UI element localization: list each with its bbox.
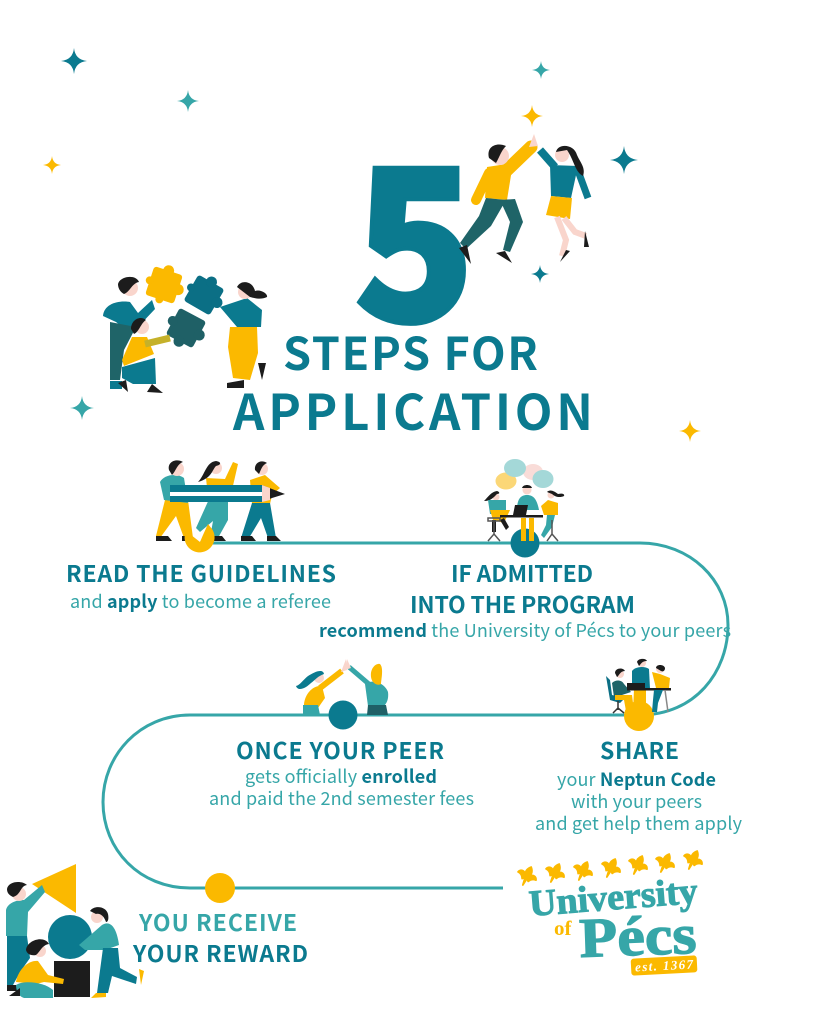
step description: and paid the 2nd semester fees (209, 785, 474, 811)
title line: steps for: STEPS FOR (283, 318, 538, 383)
illustration: team carrying pencil (156, 460, 285, 541)
step marker (328, 700, 358, 730)
step heading: INTO THE PROGRAM (410, 586, 635, 620)
step description: with your peers (571, 788, 702, 814)
title (232, 76, 593, 445)
logo wordmark: University: University (527, 871, 700, 925)
step 3: share (535, 659, 743, 836)
winding path connecting the steps (103, 543, 728, 888)
step description: and apply to become a referee (70, 588, 331, 614)
step marker (185, 524, 215, 552)
step description (209, 763, 474, 811)
title numeral 5: 5 (354, 76, 475, 382)
title line: application: APPLICATION (232, 374, 593, 445)
step marker (624, 701, 654, 731)
step heading (410, 555, 635, 620)
step 2: if admitted (319, 459, 731, 643)
step heading: YOU RECEIVE (138, 904, 297, 938)
illustration: team at desk (606, 659, 671, 713)
step marker (510, 528, 540, 558)
logo badge: established date: est. 1367 (635, 956, 694, 975)
step description (535, 766, 743, 836)
illustration: high five pair (459, 134, 589, 264)
step description: gets officially enrolled (245, 763, 437, 789)
illustration: team building shapes (6, 864, 144, 998)
illustration: puzzle team (103, 260, 267, 393)
step heading: YOUR REWARD (132, 935, 308, 969)
step marker (205, 873, 235, 903)
decorative sparkle stars (43, 48, 701, 442)
illustration: two peers high five (296, 659, 388, 715)
step heading: READ THE GUIDELINES (66, 555, 336, 589)
logo wordmark: Pécs: Pécs (578, 904, 697, 970)
step description: and get help them apply (535, 810, 743, 836)
step description: recommend the University of Pécs to your peers (319, 617, 731, 643)
step heading: IF ADMITTED (451, 555, 593, 589)
logo: University of Pécs (514, 847, 706, 976)
step heading: ONCE YOUR PEER (236, 732, 444, 766)
puzzle pieces (140, 260, 232, 356)
logo fleurs row (514, 847, 706, 889)
step heading: SHARE (600, 732, 679, 766)
illustration: meeting with speech bubbles (484, 459, 564, 541)
step 1: read the guidelines (66, 460, 336, 614)
step 5: you receive your reward (6, 864, 308, 998)
step 4: once your peer (209, 659, 474, 811)
step description: your Neptun Code (557, 766, 716, 792)
step heading (132, 904, 308, 969)
logo wordmark: of: of (554, 916, 572, 940)
